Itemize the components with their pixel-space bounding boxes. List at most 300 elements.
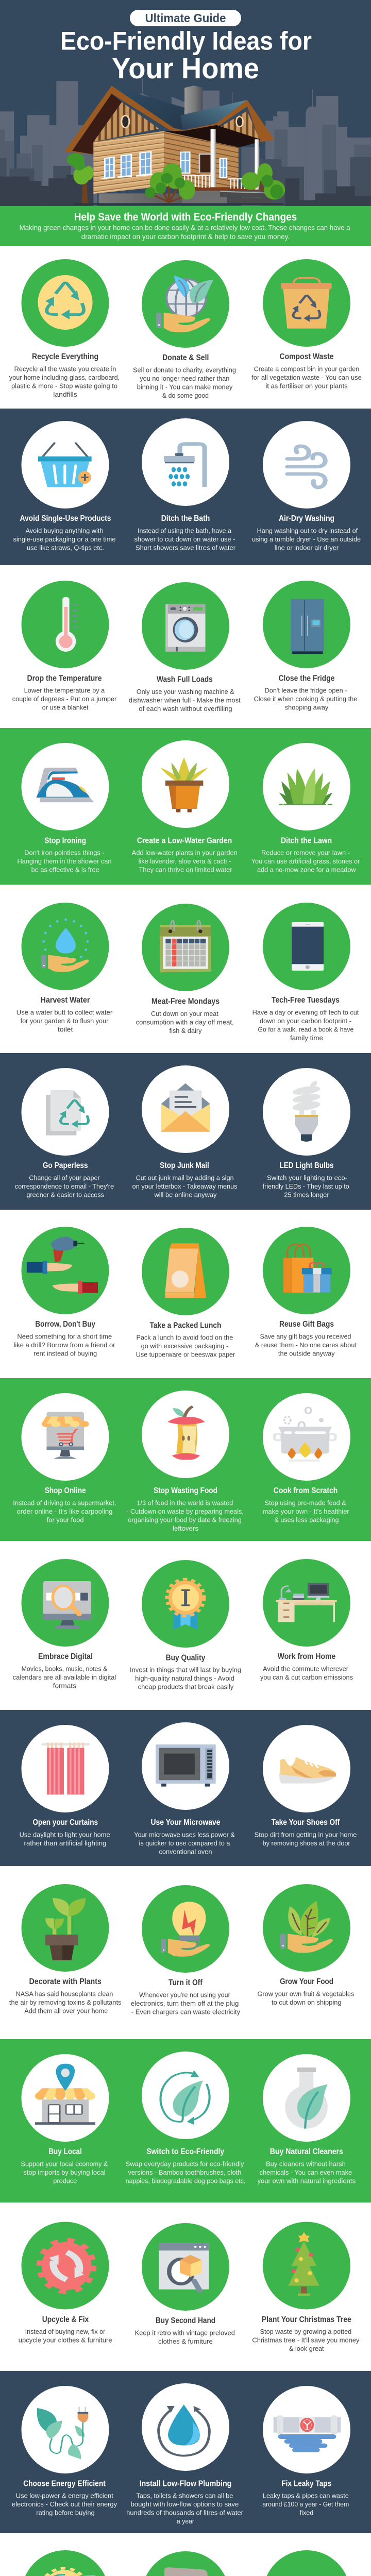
text: dishwasher when full - Make the most (129, 697, 241, 704)
card: Work from Home (260, 1559, 353, 1681)
card: Shop Online (13, 1393, 116, 1524)
text: calendars are all available in digital (13, 1674, 116, 1681)
heading: Drop the Temperature (27, 674, 102, 683)
card: Upcycle & Fix (19, 2222, 112, 2344)
heading: Switch to Eco-Friendly (146, 2147, 224, 2156)
card: Cook from Scratch (263, 1393, 350, 1524)
badge: Ultimate Guide: Ultimate Guide (145, 11, 226, 25)
text (263, 1175, 349, 1198)
card: Compost Waste (251, 259, 362, 389)
heading: Ditch the Lawn (281, 837, 332, 845)
text: Use daylight to light your home (20, 1831, 110, 1838)
icon: globe in hand (142, 260, 229, 348)
text: will be online anyway (154, 1191, 217, 1198)
text: conventional oven (159, 1849, 212, 1856)
text: is quicker to use compared to a (139, 1840, 230, 1847)
text (252, 528, 361, 551)
text: shopping away (285, 704, 329, 711)
text: Stop dirt from getting in your home (255, 1831, 357, 1838)
heading: Open your Curtains (32, 1818, 98, 1827)
text: Cut down on your meat (151, 1010, 218, 1018)
text: 25 times longer (284, 1191, 329, 1198)
intro band (20, 211, 350, 241)
card: Embrace Digital (13, 1559, 116, 1690)
card: Ditch the Bath (134, 418, 235, 551)
text (258, 2161, 356, 2184)
heading: Harvest Water (40, 996, 90, 1005)
icon: gear with arrows (22, 2222, 109, 2309)
text (255, 1333, 357, 1357)
text: landfills (53, 391, 77, 398)
text: Movies, books, music, notes & (22, 1665, 108, 1672)
text (9, 1991, 122, 2014)
text: Add low-water plants in your garden (132, 849, 238, 856)
text (13, 528, 116, 551)
icon: online shop (22, 1393, 109, 1481)
intro text: Making green changes in your home can be done easily & at a relatively low cost. These changes can have a (20, 224, 350, 232)
text: Reduce or remove your lawn - (261, 849, 350, 856)
text: by removing shoes at the door (263, 1840, 350, 1847)
text: shower to cut down on water use - (134, 536, 235, 543)
text: using a tumble dryer - Use an outside (252, 536, 361, 543)
card: Open your Curtains (20, 1725, 110, 1847)
icon: lunch bag (142, 1228, 229, 1315)
text: order online - It's like carpooling (16, 1508, 113, 1515)
heading: Stop Wasting Food (154, 1486, 217, 1495)
text: Add them all over your home (24, 2007, 108, 2014)
text: you no longer need rather than (140, 375, 229, 382)
text: Have a day or evening off tech to cut (252, 1009, 359, 1016)
text (136, 1010, 234, 1035)
text: fish & dairy (170, 1027, 202, 1035)
text (133, 367, 236, 399)
text (254, 687, 358, 711)
text: & uses less packaging (274, 1517, 339, 1524)
text: & do some good (162, 392, 209, 399)
text (136, 1334, 235, 1358)
title: Eco-Friendly Ideas for (60, 27, 312, 56)
heading: Create a Low-Water Garden (137, 837, 232, 845)
text: be as effective & is free (31, 867, 99, 874)
icon: shower (142, 418, 229, 506)
heading: Tech-Free Tuesdays (272, 996, 340, 1005)
text: on your letterbox - Takeaway menus (132, 1183, 237, 1190)
heading: Buy Local (48, 2147, 82, 2156)
card: Get a Smart Thermostat (128, 2551, 241, 2576)
text (9, 366, 120, 398)
text: Hanging them in the shower can (18, 858, 112, 865)
text: Buy cleaners without harsh (266, 2161, 346, 2168)
text (126, 2493, 243, 2525)
icon: basket (22, 421, 109, 509)
text (130, 1666, 241, 1691)
intro text: dramatic impact on your carbon footprint & help to save you money. (81, 232, 290, 241)
text: Hang washing out to dry instead of (257, 528, 358, 535)
icon: monitor with magnifier (22, 1559, 109, 1647)
text: like lavender, aloe vera & cacti - (139, 858, 231, 865)
card: Create a Low-Water Garden (132, 740, 238, 874)
text: Cut out junk mail by adding a sign (136, 1175, 234, 1182)
icon: cooking pot (263, 1393, 350, 1481)
left tree (67, 153, 93, 203)
text: plastic & more - Stop waste going to (11, 382, 117, 389)
right bush (241, 163, 285, 199)
text: organising your food by date & freezing (128, 1517, 242, 1524)
text (13, 1499, 116, 1524)
text: use like straws, Q-tips etc. (27, 544, 104, 551)
card: Meat-Free Mondays (136, 904, 234, 1035)
text: NASA has said houseplants clean (16, 1991, 113, 1998)
text: Stop waste by growing a potted (260, 2328, 351, 2335)
text (263, 1499, 349, 1524)
icon: gift bag and box (263, 1227, 350, 1314)
text: Avoid buying anything with (26, 528, 104, 535)
text: family time (290, 1035, 323, 1042)
text: your home including glass, cardboard, (9, 374, 120, 381)
icon: light bulb (263, 1068, 350, 1156)
heading: Take Your Shoes Off (272, 1818, 340, 1827)
icon: leaf and plug (22, 2386, 109, 2473)
heading: Buy Second Hand (156, 2316, 215, 2325)
card: Choose Energy Efficient (12, 2386, 117, 2516)
icon: christmas tree (263, 2222, 350, 2309)
text: around £100 a year - Get them (262, 2501, 349, 2508)
text: it as fertiliser on your plants (265, 382, 348, 389)
text (15, 1175, 114, 1198)
text: Save any gift bags you received (260, 1333, 351, 1341)
text: bought with low-flow options to save (131, 2501, 239, 2508)
icon: rosette (142, 1560, 229, 1648)
text: versions - Bamboo toothbrushes, cloth (128, 2169, 241, 2176)
text: or use a blanket (42, 704, 89, 711)
heading: Meat-Free Mondays (151, 997, 220, 1006)
text: Grow your own fruit & vegetables (258, 1991, 354, 1998)
heading: Decorate with Plants (29, 1977, 102, 1986)
text: Whenever you're not using your (139, 1992, 230, 1999)
card: Turn it Off (131, 1885, 241, 2015)
heading: Ditch the Bath (161, 514, 210, 523)
card: Use Your Microwave (134, 1722, 235, 1856)
text: leftovers (173, 1525, 198, 1532)
text (129, 688, 241, 713)
text: Support your local economy & (21, 2161, 108, 2168)
icon: leaf cycle (142, 2052, 229, 2139)
icon: washing machine (142, 582, 229, 670)
text (134, 528, 235, 551)
card: Go Paperless (15, 1068, 114, 1198)
text (134, 1831, 235, 1856)
heading: Avoid Single-Use Products (20, 514, 111, 523)
text (16, 1009, 112, 1033)
card: Ditch the Lawn (251, 743, 360, 874)
heading: Buy Quality (166, 1654, 205, 1662)
text: friendly LEDs - They last up to (263, 1183, 349, 1190)
text: 1/3 of food in the world is wasted (137, 1499, 233, 1506)
text: rent instead of buying (33, 1350, 97, 1357)
card: LED Light Bulbs (263, 1068, 350, 1198)
text (252, 2328, 360, 2352)
text (260, 1665, 353, 1681)
text (131, 1992, 241, 2015)
card: Fix Leaky Taps (262, 2386, 350, 2516)
card: Install Low-Flow Plumbing (126, 2383, 243, 2525)
card: Take a Packed Lunch (136, 1228, 235, 1358)
text (132, 1175, 237, 1198)
text: Go for a walk, read a book & have (258, 1026, 353, 1033)
house illustration (64, 86, 285, 205)
heading: Plant Your Christmas Tree (262, 2315, 351, 2324)
text: They can thrive on limited water (139, 867, 232, 874)
heading: Stop Junk Mail (160, 1161, 209, 1170)
heading: Turn it Off (168, 1978, 203, 1987)
text: & reuse them - No one cares about (255, 1342, 357, 1349)
text (251, 366, 362, 389)
icon: desk (263, 1559, 350, 1647)
icon: compost bin (263, 259, 350, 347)
text: to cut down on shipping (272, 1999, 342, 2006)
text (13, 1333, 115, 1357)
text (135, 2330, 235, 2345)
card: Close the Fridge (254, 581, 358, 711)
icon: shoe (263, 1725, 350, 1812)
heading: Grow Your Food (280, 1977, 333, 1986)
text: You can use artificial grass, stones or (251, 858, 360, 865)
text: Create a compost bin in your garden (254, 366, 359, 373)
title (60, 27, 312, 85)
heading: Stop Ironing (44, 837, 86, 845)
heading: Donate & Sell (162, 353, 209, 362)
text: for your food (47, 1517, 84, 1524)
text: your own with natural ingredients (258, 2177, 356, 2184)
text: correspondence to email - They're (15, 1183, 114, 1190)
heading: Recycle Everything (32, 352, 98, 361)
text (132, 849, 238, 874)
icon: water meter (263, 2550, 350, 2576)
text (262, 2493, 349, 2516)
text: Pack a lunch to avoid food on the (136, 1334, 233, 1342)
icon: thermostat (142, 2551, 229, 2576)
card: Grow Your Food (258, 1884, 354, 2006)
text: - Cutdown on waste by preparing meals, (126, 1508, 244, 1515)
text: Avoid the commute wherever (263, 1665, 348, 1672)
icon: envelope (142, 1065, 229, 1153)
hero panel (0, 0, 371, 207)
text: line or indoor air dryer (275, 544, 339, 551)
text (21, 2161, 108, 2184)
text: Recycle all the waste you create in (14, 366, 116, 373)
card: Air-Dry Washing (252, 421, 361, 551)
text: Only use your washing machine & (137, 688, 234, 696)
heading: Take a Packed Lunch (149, 1321, 222, 1330)
heading: Embrace Digital (38, 1652, 93, 1661)
card: Choose Green Energy (11, 2550, 118, 2576)
heading: Fix Leaky Taps (281, 2479, 331, 2488)
text: Lower the temperature by a (24, 687, 105, 694)
text: Need something for a short time (17, 1333, 112, 1341)
card: Plant Your Christmas Tree (252, 2222, 360, 2352)
card: Buy Natural Cleaners (258, 2054, 356, 2184)
icon: local shop pin (22, 2054, 109, 2142)
text: Leaky taps & pipes can waste (263, 2493, 349, 2500)
text (126, 2161, 245, 2184)
card: Drop the Temperature (12, 581, 116, 711)
card: Get a Smart Water Meter (250, 2550, 361, 2576)
card: Stop Ironing (18, 743, 112, 874)
icon: bottle with leaf (263, 2054, 350, 2142)
text (12, 687, 116, 711)
icon: plant pot (22, 1884, 109, 1972)
card: Harvest Water (16, 903, 112, 1033)
icon: wind (263, 421, 350, 509)
text: down on your carbon footprint - (260, 1018, 351, 1025)
card: Switch to Eco-Friendly (126, 2052, 245, 2184)
intro text (20, 224, 350, 241)
text: make your own - It's healthier (263, 1508, 349, 1515)
title: Your Home (112, 52, 259, 85)
text (255, 1831, 357, 1847)
icon: browser with box (142, 2223, 229, 2311)
text: high-quality natural things - Avoid (135, 1675, 234, 1682)
text: Keep it retro with vintage preloved (135, 2330, 235, 2337)
heading: LED Light Bulbs (279, 1161, 334, 1170)
card: Borrow, Don't Buy (13, 1227, 115, 1357)
text: clothes & furniture (158, 2338, 213, 2345)
text: & look great (289, 2345, 324, 2352)
text: you can & cut carbon emissions (260, 1674, 353, 1681)
text: binning it - You can make money (137, 383, 233, 391)
card: Avoid Single-Use Products (13, 421, 116, 551)
card: Decorate with Plants (9, 1884, 122, 2014)
icon: apple core (142, 1391, 229, 1478)
heading: Work from Home (278, 1652, 335, 1661)
text: Switch your lighting to eco- (267, 1175, 347, 1182)
text: Swap everyday products for eco-friendly (126, 2161, 244, 2168)
text: stop imports by buying local (23, 2169, 106, 2176)
text: the air by removing toxins & pollutants (9, 1999, 122, 2006)
text: like a drill? Borrow from a friend or (13, 1342, 115, 1349)
icon: curtains (22, 1725, 109, 1812)
text (13, 1665, 116, 1690)
text: Sell or donate to charity, everything (133, 367, 236, 374)
heading: Cook from Scratch (274, 1486, 338, 1495)
heading: Close the Fridge (278, 674, 335, 683)
card: Recycle Everything (9, 259, 120, 398)
text: rating before buying (36, 2509, 95, 2516)
text: fixed (300, 2509, 313, 2516)
text: Use low-power & energy efficient (16, 2493, 113, 2500)
text (20, 1831, 110, 1847)
text: - Even chargers can waste electricity (131, 2008, 241, 2015)
icon: drill and hands (22, 1227, 109, 1314)
text: Christmas tree - It'll save you money (252, 2337, 360, 2344)
heading: Compost Waste (279, 352, 334, 361)
text: Use a water butt to collect water (16, 1009, 112, 1016)
text: formats (53, 1683, 76, 1690)
badge: Ultimate Guide (130, 10, 241, 26)
heading: Go Paperless (43, 1161, 88, 1170)
icon: leaves in hand (263, 1884, 350, 1972)
skyline background (0, 78, 371, 207)
text: cheap products that break easily (138, 1684, 234, 1691)
text (126, 1499, 244, 1532)
text (18, 849, 112, 874)
icon: grass (263, 743, 350, 831)
heading: Shop Online (45, 1486, 86, 1495)
text: Don't leave the fridge open - (265, 687, 347, 694)
heading: Reuse Gift Bags (279, 1320, 334, 1329)
text: nappies, biodegradable dog poo bags etc. (126, 2177, 245, 2184)
text (252, 1009, 359, 1042)
icon: calendar (142, 904, 229, 991)
card: Buy Quality (130, 1560, 241, 1691)
card: Reuse Gift Bags (255, 1227, 357, 1357)
heading: Wash Full Loads (157, 675, 213, 684)
text: the outside anyway (278, 1350, 335, 1357)
text: for your garden & to flush your (21, 1018, 108, 1025)
text: Your microwave uses less power & (134, 1831, 235, 1838)
text: Instead of using the bath, have a (138, 528, 231, 535)
icon: water drop cycle (142, 2383, 229, 2471)
intro heading: Help Save the World with Eco-Friendly Changes (74, 211, 297, 223)
text: a year (177, 2518, 194, 2525)
text: single-use packaging or a one time (13, 536, 116, 543)
text: produce (53, 2177, 77, 2184)
text: of each wash without overfilling (139, 705, 232, 713)
text: greener & easier to access (26, 1191, 104, 1198)
card: Donate & Sell (133, 260, 236, 399)
card: Stop Wasting Food (126, 1391, 244, 1532)
icon: smartphone (263, 903, 350, 990)
icon: potted plant (142, 740, 229, 828)
text: couple of degrees - Put on a jumper (12, 696, 116, 703)
text: rather than artificial lighting (24, 1840, 107, 1847)
icon: sun and leaf (22, 2550, 109, 2576)
card: Tech-Free Tuesdays (252, 903, 359, 1042)
heading: Upcycle & Fix (42, 2315, 89, 2324)
text: toilet (58, 1026, 73, 1033)
icon: water in hand (22, 903, 109, 990)
text: Instead of driving to a supermarket, (13, 1499, 116, 1506)
heading: Air-Dry Washing (279, 514, 334, 523)
heading: Borrow, Don't Buy (35, 1320, 95, 1329)
text: Close it when cooking & putting the (254, 696, 358, 703)
text (12, 2493, 117, 2516)
text: Taps, toilets & showers can all be (136, 2493, 233, 2500)
heading: Use Your Microwave (150, 1818, 221, 1827)
icon: bulb in hand (142, 1885, 229, 1973)
card: Buy Second Hand (135, 2223, 235, 2345)
text: Change all of your paper (29, 1175, 100, 1182)
icon: recycled paper (22, 1068, 109, 1156)
text: for all vegetation waste - You can use (251, 374, 362, 381)
icon: fridge (263, 581, 350, 668)
text (251, 849, 360, 874)
card: Wash Full Loads (129, 582, 241, 713)
text (19, 2328, 112, 2344)
text: chemicals - You can even make (260, 2169, 352, 2176)
icon: microwave (142, 1722, 229, 1810)
text: hundreds of thousands of litres of water (126, 2509, 243, 2516)
text: Don't iron pointless things - (24, 849, 105, 856)
text: Instead of buying new, fix or (25, 2328, 105, 2335)
icon: leaking pipe (263, 2386, 350, 2473)
card: Stop Junk Mail (132, 1065, 237, 1198)
text: electronics, turn them off at the plug (131, 2000, 239, 2007)
heading: Install Low-Flow Plumbing (140, 2479, 231, 2488)
centre bush (145, 163, 195, 203)
heading: Buy Natural Cleaners (270, 2147, 343, 2156)
icon: recycle (22, 259, 109, 347)
